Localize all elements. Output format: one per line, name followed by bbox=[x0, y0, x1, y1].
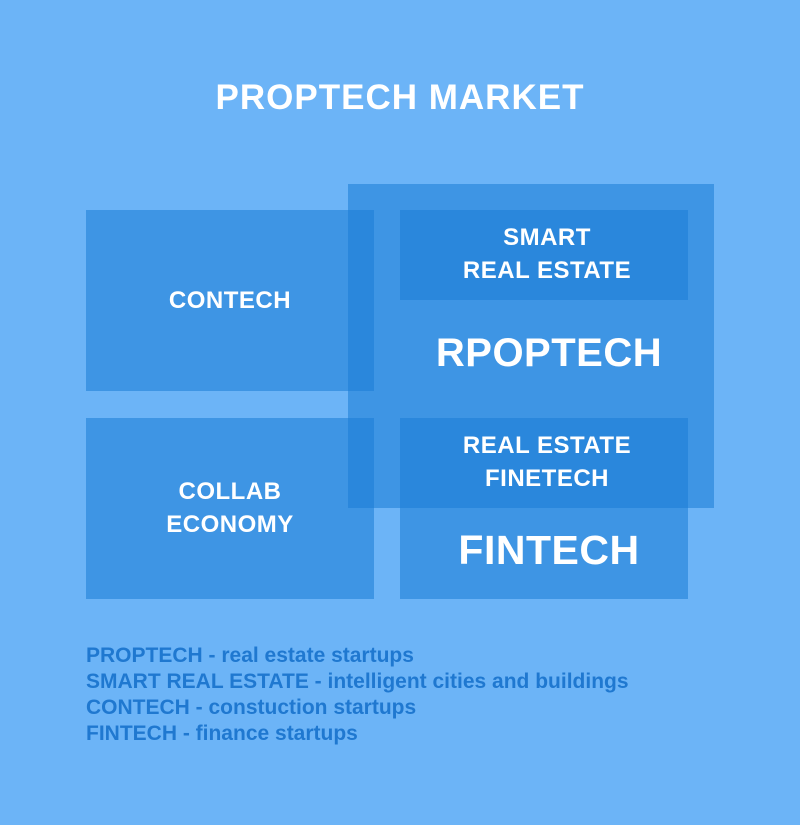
label: collab economy bbox=[166, 478, 294, 538]
label: fintech: FINTECH bbox=[458, 526, 640, 572]
label: rpoptech: RPOPTECH bbox=[436, 330, 662, 374]
legend: CONTECH - constuction startups bbox=[86, 696, 416, 719]
legend bbox=[86, 644, 629, 745]
panel: proptech overlay bbox=[348, 184, 714, 508]
label: smart real estate: SMART bbox=[503, 224, 591, 251]
panel: fintech bbox=[400, 418, 688, 599]
label: smart real estate bbox=[463, 224, 631, 284]
panel: collab economy bbox=[86, 418, 374, 599]
label: real estate finetech bbox=[463, 432, 631, 492]
panel: contech bbox=[86, 210, 374, 391]
label: smart real estate: REAL ESTATE bbox=[463, 257, 631, 284]
legend: SMART REAL ESTATE - intelligent cities and buildings bbox=[86, 670, 629, 693]
title: PROPTECH MARKET bbox=[216, 78, 584, 116]
label: collab economy: ECONOMY bbox=[166, 511, 294, 538]
label: real estate finetech: REAL ESTATE bbox=[463, 432, 631, 459]
legend: PROPTECH - real estate startups bbox=[86, 644, 414, 667]
legend: FINTECH - finance startups bbox=[86, 722, 358, 745]
label: collab economy: COLLAB bbox=[178, 478, 281, 505]
label: contech: CONTECH bbox=[169, 287, 291, 314]
panel: smart real estate bbox=[400, 210, 688, 300]
label: real estate finetech: FINETECH bbox=[485, 465, 609, 492]
